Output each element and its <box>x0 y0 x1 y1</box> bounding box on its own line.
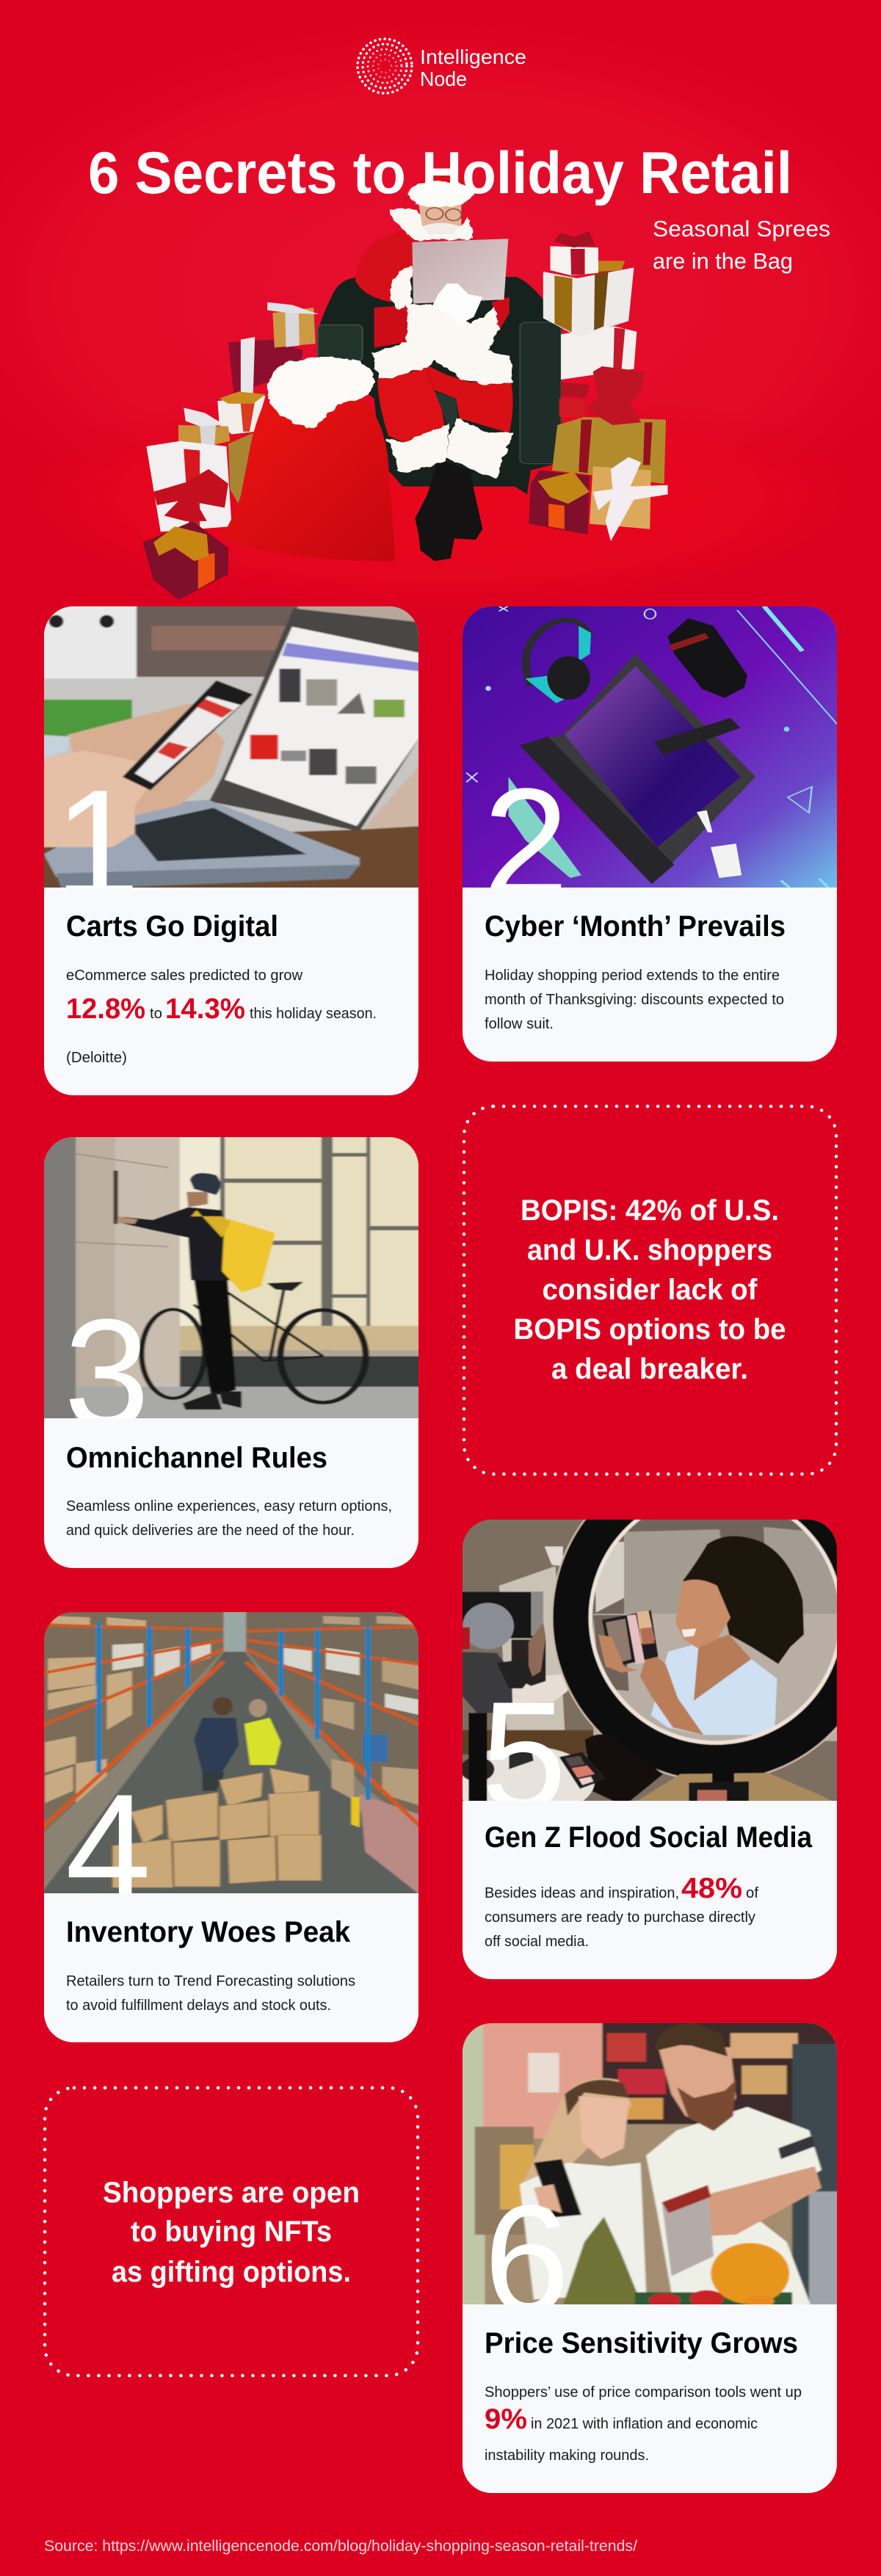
image: hands with phone and laptop online shop <box>44 606 418 888</box>
armchair <box>317 277 561 494</box>
panel: card 4 Inventory Woes Peak <box>40 1610 421 2042</box>
woman: arm and hand <box>640 1650 703 1735</box>
icon: dotted sphere <box>358 39 412 93</box>
body text with 9% figure <box>485 2384 802 2464</box>
boxes <box>112 1768 322 1887</box>
sleeve cuff <box>390 266 411 311</box>
produce <box>562 2217 643 2309</box>
headphones <box>526 620 590 686</box>
body text: to avoid fulfillment delays and stock outs. <box>66 1998 331 2014</box>
product pack <box>662 2185 714 2276</box>
number 6: 6 <box>484 2173 570 2345</box>
bicycle <box>142 1289 366 1403</box>
heading: Gen Z Flood Social Media <box>485 1821 813 1854</box>
body text with 9% figure: 9% <box>485 2403 527 2435</box>
subtitle: are in the Bag <box>653 248 793 274</box>
gifts floor right <box>529 457 667 541</box>
title: 6 Secrets to Holiday Retail <box>88 140 792 206</box>
laptop screen <box>209 609 421 831</box>
number 3: 3 <box>64 1287 150 1459</box>
boot trims <box>387 424 449 473</box>
callout text <box>103 2177 360 2288</box>
body text with growth figures: 12.8% <box>66 993 145 1025</box>
subtitle: Seasonal Sprees <box>653 216 830 242</box>
tablet <box>509 777 581 878</box>
callout text: a deal breaker. <box>551 1353 748 1385</box>
callout text: as gifting options. <box>112 2256 351 2288</box>
body text: Retailers turn to Trend Forecasting solutions <box>66 1973 355 1989</box>
number 5: 5 <box>481 1669 567 1842</box>
image: gadgets on purple background <box>463 606 837 888</box>
palette <box>602 1610 659 1668</box>
source line: Source: https://www.intelligencenode.com/blog/holiday-shopping-season-retail-trends/ <box>44 2538 637 2555</box>
phone <box>655 718 741 755</box>
body text <box>66 1973 355 2014</box>
hero background glow <box>0 0 881 602</box>
number 1: 1 <box>54 758 140 930</box>
logo wordmark: Node <box>420 68 467 90</box>
head: face and hat <box>418 203 461 226</box>
boots <box>415 460 482 561</box>
decorative lines and shapes <box>737 610 837 725</box>
body text with growth figures: eCommerce sales predicted to grow <box>66 968 303 984</box>
left desk and camera <box>457 1592 543 1639</box>
right racks <box>246 1610 421 1829</box>
number 2: 2 <box>483 756 569 929</box>
laptop base <box>44 799 360 877</box>
number 4: 4 <box>65 1762 151 1934</box>
callout: NFTs <box>45 2088 418 2376</box>
logo: Intelligence Node <box>358 39 526 93</box>
body text: month of Thanksgiving: discounts expected to <box>485 992 784 1008</box>
body text with 48% figure <box>485 1873 758 1950</box>
body text with growth figures: to <box>150 1006 162 1022</box>
subtitle <box>653 216 830 274</box>
callout text: to buying NFTs <box>131 2216 332 2248</box>
body text with 48% figure: Besides ideas and inspiration, <box>485 1885 679 1901</box>
phone <box>123 681 253 790</box>
body text with 48% figure: consumers are ready to purchase directly <box>485 1909 755 1926</box>
body text: follow suit. <box>485 1016 554 1032</box>
camera lens <box>667 618 747 698</box>
body text with 48% figure: off social media. <box>485 1934 589 1950</box>
woman <box>523 2078 632 2184</box>
sack <box>221 357 396 561</box>
beard <box>389 208 474 241</box>
panel: card 3 Omnichannel Rules <box>40 1134 421 1568</box>
glove <box>433 283 482 324</box>
body text with growth figures: this holiday season. <box>250 1006 377 1022</box>
callout: BOPIS <box>464 1106 836 1474</box>
courier <box>194 1279 236 1394</box>
body text: Seamless online experiences, easy return options, <box>66 1498 392 1514</box>
panel: card 2 Cyber Month Prevails <box>463 606 837 1062</box>
callout text <box>514 1194 786 1385</box>
heading: Inventory Woes Peak <box>66 1916 351 1948</box>
man <box>646 2107 822 2309</box>
laptop <box>412 239 508 304</box>
image: influencer filming through ring light <box>453 1454 880 1842</box>
logo wordmark <box>420 46 526 90</box>
body text with growth figures: 14.3% <box>165 993 245 1025</box>
body text with 48% figure: of <box>746 1885 758 1901</box>
heading: Price Sensitivity Grows <box>485 2327 798 2359</box>
body text <box>66 1498 392 1539</box>
woman: shirt <box>651 1643 777 1735</box>
image: couple comparing prices in a supermarket <box>458 2020 843 2345</box>
body text <box>485 968 784 1032</box>
legs <box>377 363 446 443</box>
panel: card 1 Carts Go Digital <box>40 603 421 1095</box>
image: warehouse with workers and boxes <box>44 1612 418 1893</box>
hands <box>68 703 225 816</box>
body text with 9% figure: in 2021 with inflation and economic <box>531 2416 758 2432</box>
body text with 9% figure: Shoppers’ use of price comparison tools went up <box>485 2384 802 2401</box>
panel: card 6 Price Sensitivity Grows <box>458 2020 843 2493</box>
callout text: and U.K. shoppers <box>527 1234 772 1266</box>
ring light <box>552 1454 880 1781</box>
jacket <box>355 230 417 302</box>
callout text: Shoppers are open <box>103 2177 360 2209</box>
body text: Holiday shopping period extends to the entire <box>485 968 780 984</box>
gifts left stack <box>143 302 319 600</box>
heading: Cyber ‘Month’ Prevails <box>485 910 786 943</box>
Santa <box>355 174 513 561</box>
earbuds <box>697 810 712 832</box>
woman: hair <box>683 1536 804 1664</box>
laptop <box>520 654 755 884</box>
body text with growth figures: (Deloitte) <box>66 1050 127 1066</box>
body text with growth figures <box>66 968 377 1066</box>
workers <box>194 1718 239 1773</box>
fur body trim <box>372 208 513 479</box>
gifts right stack <box>543 231 666 484</box>
body text: and quick deliveries are the need of the hour. <box>66 1523 355 1539</box>
body text with 9% figure: instability making rounds. <box>485 2448 649 2464</box>
woman: neck and face <box>694 1635 751 1701</box>
left racks <box>40 1610 224 1837</box>
heading: Carts Go Digital <box>66 910 278 943</box>
hero illustration: Santa with laptop, sack and gifts <box>143 174 667 600</box>
panel: card 5 Gen Z Flood Social Media <box>453 1454 880 1979</box>
inner couch <box>587 1514 842 1622</box>
image: courier with bicycle <box>44 1137 418 1418</box>
callout text: consider lack of <box>542 1274 758 1306</box>
heading: Omnichannel Rules <box>66 1442 327 1474</box>
hero floor glow <box>0 382 881 617</box>
table, legs and palette <box>585 1734 663 1806</box>
callout text: BOPIS options to be <box>514 1313 786 1346</box>
callout text: BOPIS: 42% of U.S. <box>521 1194 779 1227</box>
logo wordmark: Intelligence <box>420 46 526 68</box>
body text with 48% figure: 48% <box>681 1873 742 1904</box>
